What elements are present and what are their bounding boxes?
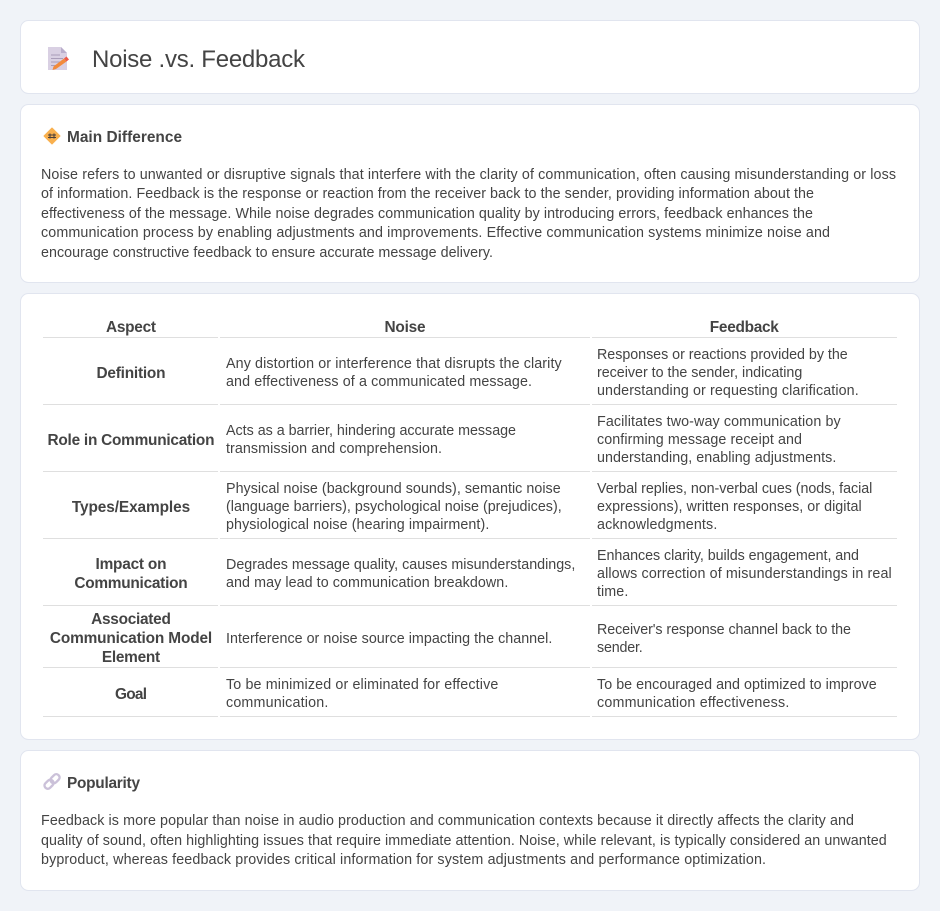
heading: main difference: Main Difference	[67, 129, 182, 146]
table row: types and examples: acknowledgments.	[597, 517, 717, 533]
text block: popularity body: byproduct, whereas feedback provides critical information for system adjustments and performance optimization.	[41, 852, 766, 868]
table row: impact on communication: and may lead to communication breakdown.	[226, 575, 508, 591]
table row: role in communication: Facilitates two-way communication by	[597, 414, 842, 430]
table row: role in communication: understanding, enabling adjustments.	[597, 450, 836, 466]
icon: orange diamond sign	[44, 128, 60, 144]
table row: role in communication: Role in Communication	[48, 432, 214, 449]
table row: impact on communication: allows correction of misunderstandings in real	[597, 566, 892, 582]
table row: role in communication: Acts as a barrier, hindering accurate message	[226, 423, 516, 439]
text block: popularity body: quality of sound, often highlighting issues that require immediate attention. Noise, while relevant, is typically considered an unwanted	[41, 833, 887, 849]
table row: definition: Responses or reactions provided by the	[597, 347, 848, 363]
table row: types and examples: Physical noise (background sounds), semantic noise	[226, 481, 561, 497]
table header row	[106, 319, 779, 336]
table row: associated communication model element: Communication Model	[50, 630, 212, 647]
text block: main difference body: encourage constructive feedback to ensure accurate message delivery.	[41, 245, 493, 261]
table row: role in communication	[48, 414, 842, 466]
panel: main difference	[20, 104, 920, 282]
table row: definition	[96, 347, 859, 399]
table row: types and examples: Verbal replies, non-verbal cues (nods, facial	[597, 481, 872, 497]
table row: goal: To be minimized or eliminated for effective	[226, 677, 498, 693]
table row: types and examples: expressions), written responses, or digital	[597, 499, 862, 515]
table row: definition: Any distortion or interference that disrupts the clarity	[226, 356, 563, 372]
table row: goal: Goal	[115, 686, 147, 703]
table row: role in communication: transmission and comprehension.	[226, 441, 442, 457]
table row: associated communication model element	[50, 611, 851, 666]
icon: document with pencil	[48, 47, 69, 70]
table row: goal: communication effectiveness.	[597, 695, 789, 711]
table row: types and examples: (language barriers), psychological noise (prejudices),	[226, 499, 562, 515]
table row: associated communication model element: Element	[102, 649, 160, 666]
table row: goal: communication.	[226, 695, 328, 711]
text block: main difference body	[41, 167, 896, 261]
table row: goal	[115, 677, 877, 711]
table row: impact on communication: Enhances clarity, builds engagement, and	[597, 548, 859, 564]
title: Noise .vs. Feedback	[92, 46, 306, 73]
table row: associated communication model element: Receiver's response channel back to the	[597, 622, 851, 638]
text block: popularity body: Feedback is more popular than noise in audio production and communication contexts because it directly affects the clarity and	[41, 813, 854, 829]
table row: definition: receiver to the sender, indicating	[597, 365, 802, 381]
table row: impact on communication	[74, 548, 892, 600]
table row: impact on communication: Degrades message quality, causes misunderstandings,	[226, 557, 575, 573]
table row: types and examples: physiological noise (hearing impairment).	[226, 517, 489, 533]
table row: types and examples: Types/Examples	[72, 499, 190, 516]
table row: impact on communication: Communication	[74, 575, 188, 592]
table row: associated communication model element: sender.	[597, 640, 643, 656]
table row: impact on communication: time.	[597, 584, 628, 600]
table row: role in communication: confirming message receipt and	[597, 432, 802, 448]
text block: main difference body: Noise refers to unwanted or disruptive signals that interfere with the clarity of communication, often causing misunderstanding or loss	[41, 167, 896, 183]
table row: definition: and effectiveness of a communicated message.	[226, 374, 532, 390]
panel: comparison table	[20, 294, 920, 740]
panel: popularity	[20, 750, 920, 890]
text block: popularity body	[41, 813, 887, 868]
heading: popularity: Popularity	[67, 775, 140, 792]
text block: main difference body: effectiveness of the message. While noise degrades communication quality by introducing errors, feedback enhances the	[41, 206, 813, 222]
table header row: Aspect	[106, 319, 156, 336]
text block: main difference body: of information. Feedback is the response or reaction from the receiver back to the sender, providing information about the	[41, 186, 814, 202]
panel: title header	[20, 20, 920, 94]
table row: definition: understanding or requesting clarification.	[597, 383, 859, 399]
table row: associated communication model element: Interference or noise source impacting the channel.	[226, 631, 552, 647]
table row: definition: Definition	[96, 365, 166, 382]
table header row: Feedback	[710, 319, 779, 336]
icon: chain link	[43, 773, 61, 790]
table row: types and examples	[72, 481, 872, 533]
table header row: Noise	[384, 319, 426, 336]
table row: associated communication model element: Associated	[91, 611, 171, 628]
table row: impact on communication: Impact on	[96, 556, 166, 573]
table row: goal: To be encouraged and optimized to improve	[597, 677, 877, 693]
text block: main difference body: communication process by enabling adjustments and improvements. Effective communication systems minimize noise and	[41, 225, 830, 241]
